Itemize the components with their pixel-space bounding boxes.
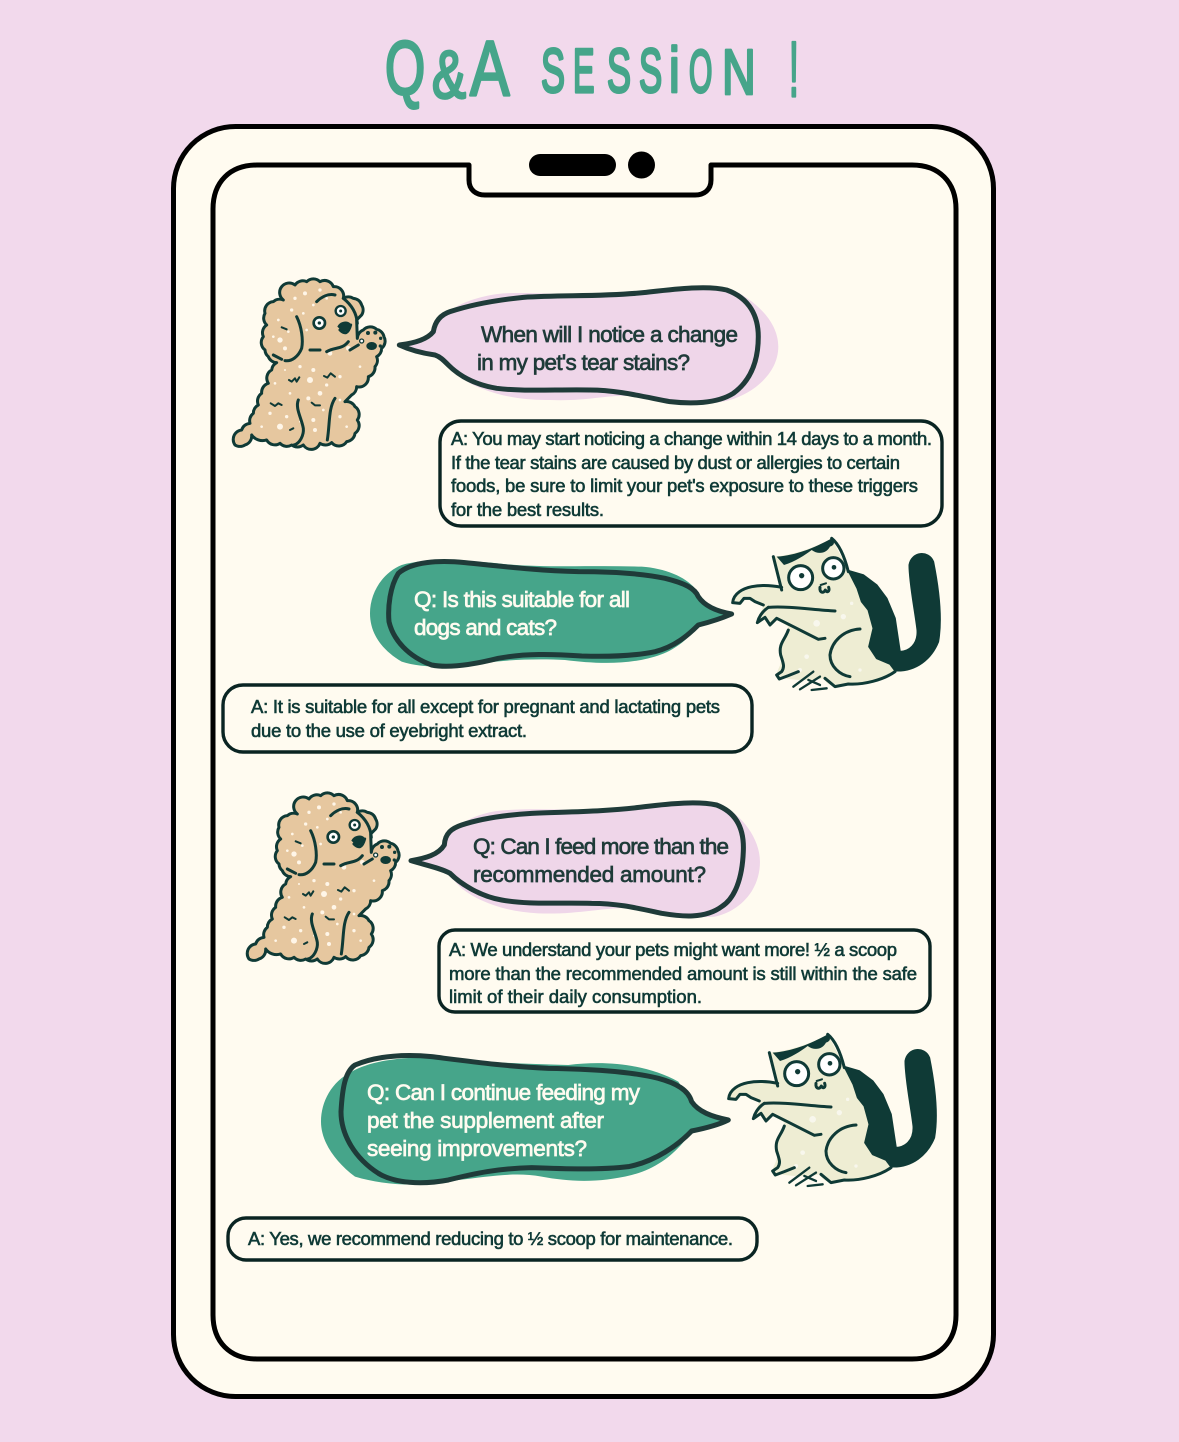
title: &	[432, 37, 466, 113]
cat illustration 2	[729, 1034, 936, 1186]
cat illustration 1	[733, 538, 940, 690]
answer box 1: for the best results.	[451, 499, 604, 520]
question bubble 4: pet the supplement after	[367, 1108, 604, 1133]
answer box 2: A: It is suitable for all except for pregnant and lactating pets	[251, 696, 720, 717]
answer box 2: due to the use of eyebright extract.	[251, 720, 527, 741]
answer box 1: If the tear stains are caused by dust or allergies to certain	[451, 452, 900, 473]
question bubble 4	[321, 1056, 728, 1185]
title: S	[639, 36, 662, 106]
answer box 3: A: We understand your pets might want more! ½ a scoop	[449, 939, 897, 960]
question bubble 1: When will I notice a change	[481, 322, 738, 347]
title: i	[669, 34, 680, 106]
title: E	[573, 37, 595, 106]
title: A	[470, 24, 510, 112]
question bubble 3: Q: Can I feed more than the	[473, 834, 729, 859]
title	[385, 24, 799, 113]
title: O	[689, 39, 712, 106]
question bubble 4: seeing improvements?	[367, 1136, 587, 1161]
answer box 4	[228, 1218, 757, 1260]
answer box 1: A: You may start noticing a change within 14 days to a month.	[451, 428, 932, 449]
title: S	[607, 36, 631, 105]
question bubble 3	[411, 803, 760, 917]
question bubble 3: recommended amount?	[473, 862, 706, 887]
question bubble 2: dogs and cats?	[414, 615, 557, 640]
question bubble 4: Q: Can I continue feeding my	[367, 1080, 641, 1105]
notch speaker	[529, 154, 616, 176]
answer box 3: limit of their daily consumption.	[449, 986, 702, 1007]
answer box 3	[439, 930, 930, 1012]
notch camera	[628, 152, 655, 178]
title: Q	[385, 25, 425, 110]
answer box 1: foods, be sure to limit your pet's exposure to these triggers	[451, 475, 918, 496]
dog illustration 1	[233, 279, 385, 449]
phone frame	[174, 126, 994, 1396]
phone screen with notch	[213, 165, 956, 1359]
question bubble 1	[399, 287, 778, 404]
answer box 4: A: Yes, we recommend reducing to ½ scoop for maintenance.	[248, 1228, 733, 1249]
title: S	[541, 36, 565, 105]
title: !	[789, 25, 799, 113]
answer box 2	[223, 685, 752, 752]
title: N	[722, 36, 756, 108]
answer box 3: more than the recommended amount is still within the safe	[449, 963, 917, 984]
question bubble 1: in my pet's tear stains?	[477, 350, 690, 375]
answer box 1	[440, 421, 942, 526]
dog illustration 2	[247, 793, 399, 963]
question bubble 2	[370, 560, 732, 667]
question bubble 2: Q: Is this suitable for all	[414, 587, 630, 612]
